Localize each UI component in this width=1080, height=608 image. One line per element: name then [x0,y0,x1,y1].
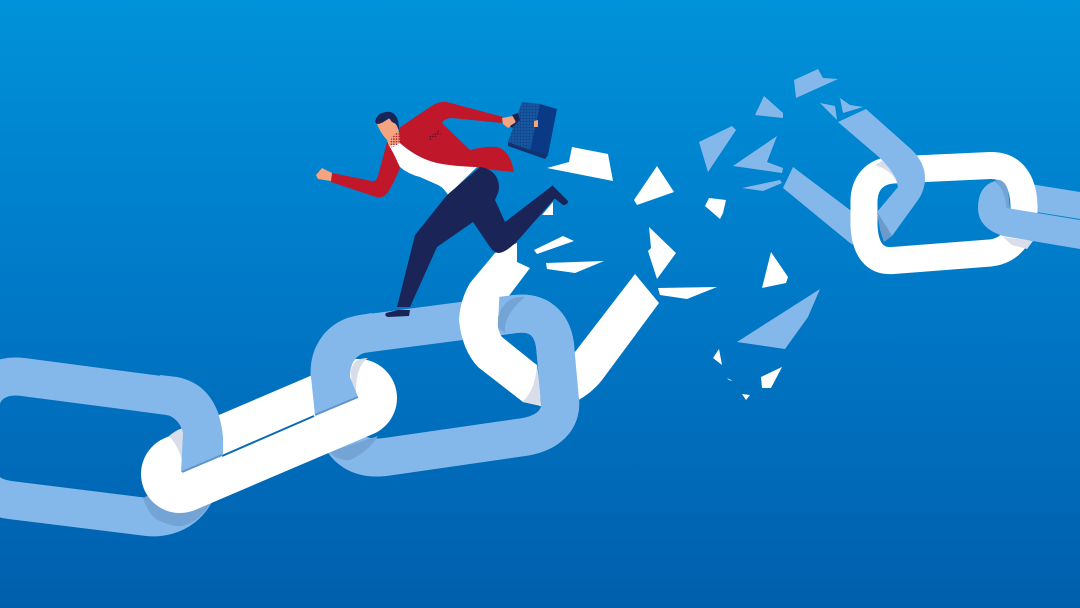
chain link: white slanted link [169,358,368,474]
chain link: white right link [864,165,1024,261]
chain link overlap: left link over white link [160,375,223,472]
chain link: right link head over white link [978,180,1080,249]
chain link: broken light blue link upper arc [838,109,925,242]
flying white shards [534,147,788,400]
hand: right [502,116,516,128]
shirt [388,143,477,195]
chain link: shading on white right link [875,161,1033,249]
briefcase handle [510,113,520,128]
hand: left [316,168,332,181]
jacket left arm [331,142,400,197]
shoe: back [552,185,568,205]
chain link shading: crescent on centre link [498,297,525,333]
figure: running businessman [316,102,568,317]
chain link: broken light blue link lower bar [783,167,866,252]
chain link overlap: centre link right arc over broken link [498,294,580,456]
chain link: far left light blue [0,377,211,526]
chain link overlap: centre link over white link [311,313,372,415]
flying light blue shards [699,69,863,349]
head [375,112,400,148]
chain link shading: slit edges under overlaps [182,397,358,472]
briefcase [508,102,557,159]
jacket body and raised arm [399,102,514,172]
chain link: broken white link lower half [459,243,659,406]
chain link: right link bar under white link [1030,184,1080,219]
chain link: centre light blue [329,314,560,460]
trousers [397,167,556,307]
shoe: front [385,310,410,317]
